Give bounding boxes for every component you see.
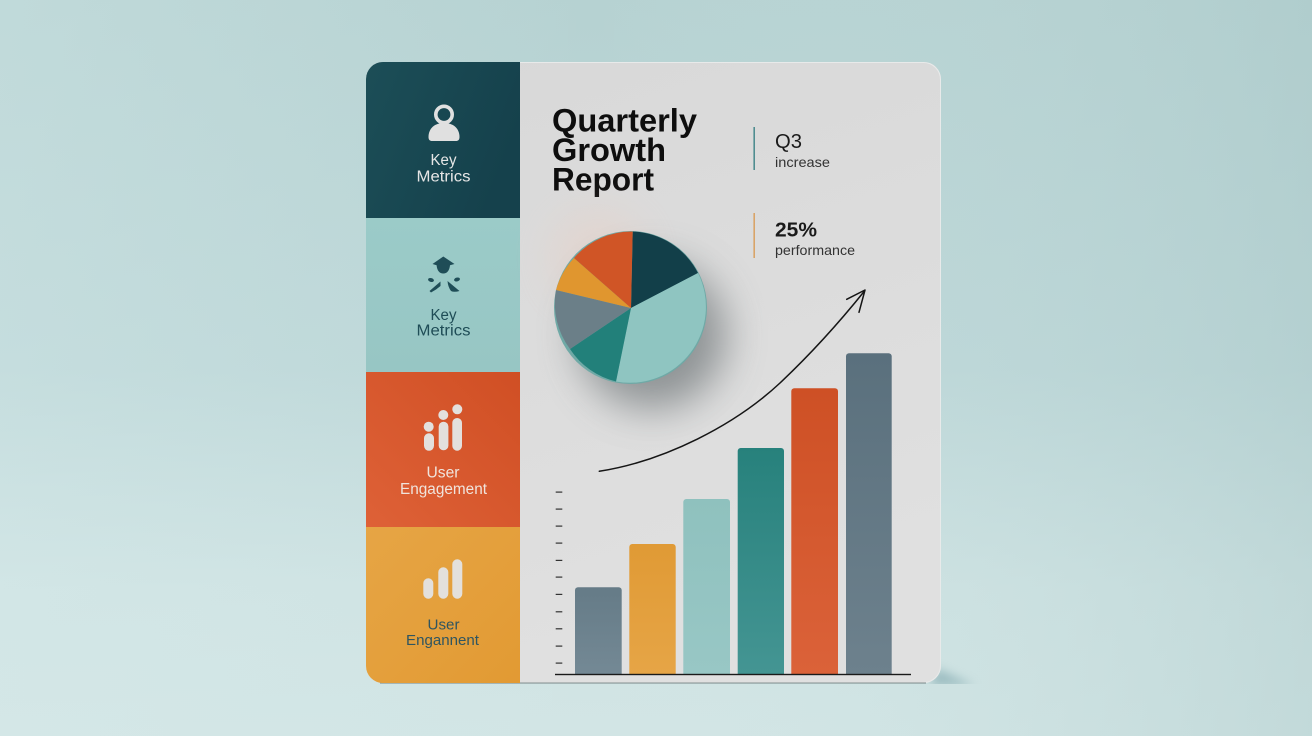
icon: person [428, 106, 460, 141]
stat: 25% performance [753, 213, 855, 258]
stat: Q3 increase: Q3 [775, 131, 802, 153]
panel: user engagement orange [366, 527, 520, 683]
card shadow [930, 668, 975, 686]
label: user engagement: Engagement [400, 481, 488, 498]
stat: 25% performance: performance [775, 242, 855, 258]
title [552, 103, 697, 198]
title: Quarterly [552, 103, 697, 139]
label: key metrics: Metrics [416, 323, 471, 340]
label: user engagement: Engannent [406, 632, 480, 649]
label: key metrics [418, 154, 470, 182]
panel: report card [366, 62, 941, 684]
title: Growth [552, 132, 666, 168]
axis ticks [556, 492, 562, 664]
panel: user engagement red [366, 372, 520, 527]
panel: sidebar [366, 62, 520, 683]
stat: Q3 increase: increase [775, 154, 830, 170]
pie chart [550, 210, 726, 409]
title: Report [552, 162, 654, 198]
arrow: growth curve [599, 290, 865, 471]
icon: bars with dots [424, 404, 462, 451]
label: user engagement: User [428, 616, 460, 633]
bars [575, 353, 892, 674]
stat: 25% performance: 25% [775, 220, 817, 242]
label: user engagement [407, 620, 479, 648]
label: key metrics [418, 309, 470, 336]
label: user engagement: User [426, 464, 460, 481]
label: key metrics: Metrics [416, 169, 471, 186]
panel: key metrics dark [366, 62, 520, 218]
label: key metrics: Key [430, 307, 457, 324]
icon: bars [423, 559, 462, 599]
bar chart [555, 353, 911, 675]
icon: graduate [428, 256, 460, 292]
panel: key metrics light [366, 218, 520, 372]
baseline [555, 674, 911, 675]
label: user engagement [400, 464, 488, 498]
stat: Q3 increase [753, 127, 830, 170]
label: key metrics: Key [430, 152, 457, 169]
